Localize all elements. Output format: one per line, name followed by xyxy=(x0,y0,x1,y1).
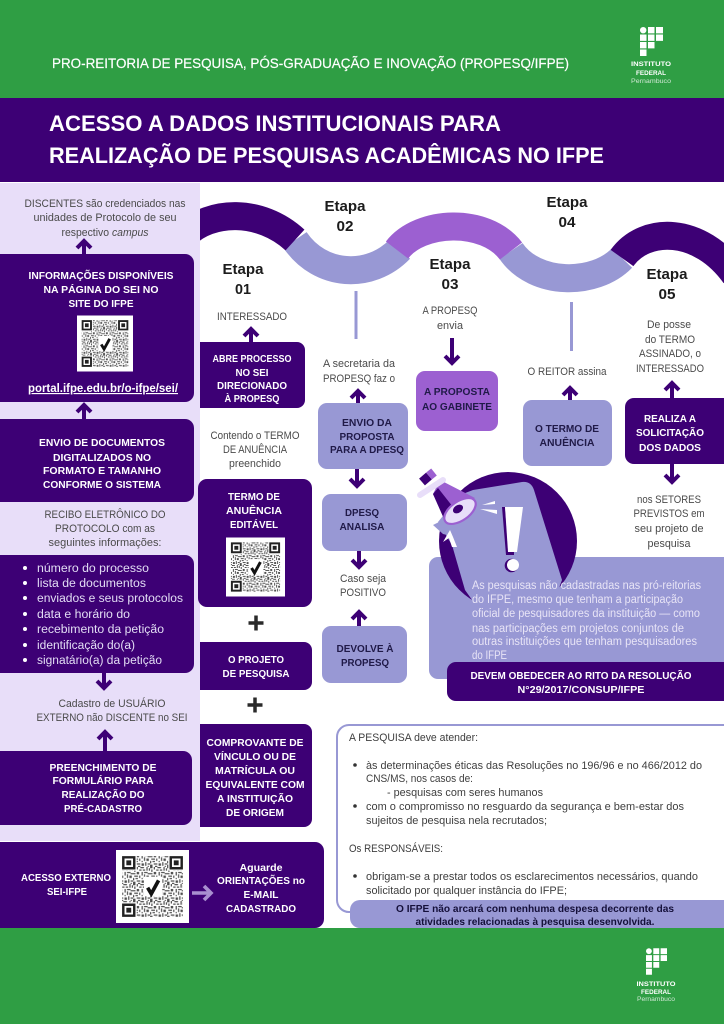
panel: envio de documentos: CONFORME O SISTEMA xyxy=(43,479,161,491)
heading: etapa 05 xyxy=(646,266,688,303)
text: cadastro xyxy=(36,697,188,724)
panel: requisitos da pesquisa: solicitado por qualquer instância do IFPE; xyxy=(366,885,567,897)
panel: informações disponíveis: NA PÁGINA DO SEI NO xyxy=(44,283,158,296)
text: contendo o termo: Contendo o TERMO xyxy=(210,430,300,442)
panel: informações disponíveis: SITE DO IFPE xyxy=(68,298,134,310)
panel: projeto de pesquisa: O PROJETO xyxy=(228,654,284,666)
panel: preenchimento: PRÉ-CADASTRO xyxy=(64,802,142,815)
panel: requisitos da pesquisa: obrigam-se a prestar todos os esclarecimentos necessários, quando xyxy=(366,871,698,883)
panel: dpesq analisa: DPESQ xyxy=(345,507,379,519)
left column background xyxy=(0,183,200,841)
panel: preenchimento: PREENCHIMENTO DE xyxy=(50,762,156,774)
panel: envio de documentos: ENVIO DE DOCUMENTOS xyxy=(39,437,165,449)
logo: Instituto Federal bottom: Pernambuco xyxy=(637,997,676,1003)
QR code: acesso externo xyxy=(116,850,189,923)
panel: lista do recibo: signatário(a) da petição xyxy=(37,655,162,667)
panel: termo de anuência: ANUÊNCIA xyxy=(540,436,595,449)
callout text: do IFPE xyxy=(472,650,507,662)
heading: etapa 01 xyxy=(222,261,264,298)
panel: comprovante de vínculo: A INSTITUIÇÃO xyxy=(217,792,293,805)
panel: proposta ao gabinete xyxy=(416,371,498,431)
icon: alert circle xyxy=(438,472,577,625)
logo: Instituto Federal bottom xyxy=(636,948,676,1003)
panel: lista do recibo xyxy=(0,555,194,673)
icon: plus xyxy=(248,616,264,630)
header text: PRO-REITORIA DE PESQUISA, PÓS-GRADUAÇÃO E INOVAÇÃO (PROPESQ/IFPE) xyxy=(52,55,569,71)
text: secretaria xyxy=(323,358,396,385)
heading: etapa 02: 02 xyxy=(336,218,354,235)
banner: resolução: N°29/2017/CONSUP/IFPE xyxy=(518,684,644,696)
panel: comprovante de vínculo xyxy=(200,724,312,827)
logo: Instituto Federal top: Pernambuco xyxy=(631,79,672,85)
panel: envio de documentos xyxy=(0,419,194,502)
text: propesq envia: A PROPESQ xyxy=(422,305,478,317)
text: nos setores: seu projeto de xyxy=(634,523,704,535)
panel: acesso externo xyxy=(0,842,324,928)
heading: etapa 04 xyxy=(546,194,588,231)
arrow down xyxy=(352,551,366,567)
title: REALIZAÇÃO DE PESQUISAS ACADÊMICAS NO IFPE xyxy=(49,143,604,168)
arrow up xyxy=(352,612,366,626)
panel: dpesq analisa xyxy=(322,494,407,551)
panel: requisitos da pesquisa: às determinações éticas das Resoluções no 196/96 e no 466/2012 do xyxy=(366,760,702,772)
text: recibo eletrônico: seguintes informações: xyxy=(48,537,162,549)
panel: acesso externo: ACESSO EXTERNO xyxy=(21,872,111,884)
panel: envio da proposta: ENVIO DA xyxy=(342,417,392,429)
arrow up xyxy=(351,391,365,403)
panel: lista do recibo: enviados e seus protocolos xyxy=(37,593,183,605)
arrow down xyxy=(350,469,364,486)
arrow down xyxy=(445,338,459,363)
link: portal.ifpe.edu.br/o-ifpe/sei/ xyxy=(28,383,179,395)
heading: etapa 01: Etapa xyxy=(222,261,264,278)
QR code: termo xyxy=(226,538,285,596)
text: recibo eletrônico: RECIBO ELETRÔNICO DO xyxy=(44,508,166,521)
text: discentes: respectivo campus xyxy=(62,227,149,239)
panel: acesso externo: CADASTRADO xyxy=(226,903,296,915)
text: reitor assina: O REITOR assina xyxy=(528,366,607,378)
panel: comprovante de vínculo: MATRÍCULA OU xyxy=(215,764,295,777)
text: de posse: INTERESSADO xyxy=(636,363,704,375)
text: caso positivo: POSITIVO xyxy=(340,587,386,599)
heading: etapa 04: Etapa xyxy=(546,194,588,211)
panel: preenchimento xyxy=(0,751,192,825)
text: de posse: ASSINADO, o xyxy=(639,348,701,360)
panel: devolve à propesq: DEVOLVE À xyxy=(336,642,394,655)
callout text: nas participações em projetos conjuntos de xyxy=(472,623,684,635)
arrow down xyxy=(665,464,679,482)
heading: etapa 02 xyxy=(324,198,366,235)
panel: requisitos da pesquisa: A PESQUISA deve atender: xyxy=(349,732,478,744)
banner: resolução xyxy=(447,662,724,701)
text: propesq envia: envia xyxy=(437,320,464,332)
panel: comprovante de vínculo: COMPROVANTE DE xyxy=(206,737,304,749)
panel: termo de anuência xyxy=(523,400,612,466)
heading: etapa 04: 04 xyxy=(558,214,576,231)
panel: termo de anuência: O TERMO DE xyxy=(535,423,599,435)
arrow up xyxy=(665,383,679,398)
panel: comprovante de vínculo: EQUIVALENTE COM xyxy=(206,779,305,791)
arrow up xyxy=(77,241,91,254)
text: caso positivo: Caso seja xyxy=(340,573,387,585)
arrow up xyxy=(77,405,91,419)
panel: termo de anuência editável xyxy=(198,479,312,607)
icon: megaphone xyxy=(420,472,497,547)
panel: proposta ao gabinete: A PROPOSTA xyxy=(424,386,490,398)
footer band xyxy=(0,928,724,1024)
panel: lista do recibo: data e horário do xyxy=(37,609,130,621)
banner: resolução: DEVEM OBEDECER AO RITO DA RESOLUÇÃO xyxy=(470,669,692,682)
text: nos setores: nos SETORES xyxy=(637,494,701,506)
arrow up xyxy=(563,388,577,400)
panel: acesso externo: SEI-IFPE xyxy=(47,886,87,898)
panel: envio da proposta xyxy=(318,403,408,469)
text: de posse xyxy=(636,319,704,375)
connector: etapa 02 xyxy=(354,291,358,339)
panel: projeto de pesquisa xyxy=(200,642,312,690)
logo: Instituto Federal top: INSTITUTO xyxy=(631,61,671,68)
header band xyxy=(0,0,724,98)
text: secretaria: A secretaria da xyxy=(323,358,396,370)
icon: plus xyxy=(248,698,262,712)
panel: acesso externo: E-MAIL xyxy=(244,889,279,901)
panel: dpesq analisa: ANALISA xyxy=(340,521,385,533)
text: de posse: do TERMO xyxy=(645,334,695,346)
panel: requisitos da pesquisa: CNS/MS, nos casos de: xyxy=(366,773,473,785)
panel: informações disponíveis: INFORMAÇÕES DISPONÍVEIS xyxy=(28,269,174,282)
heading: etapa 05: Etapa xyxy=(646,266,688,283)
connector: etapa 04 xyxy=(570,302,573,351)
text: nos setores: pesquisa xyxy=(648,538,691,550)
banner: despesas: atividades relacionadas à pesquisa desenvolvida. xyxy=(416,916,655,928)
text: interessado: INTERESSADO xyxy=(217,311,287,323)
banner: despesas: O IFPE não arcará com nenhuma despesa decorrente das xyxy=(396,903,674,915)
text: propesq envia xyxy=(422,305,478,332)
callout text: outras instituições que tenham pesquisadores xyxy=(472,636,697,648)
heading: etapa 03: Etapa xyxy=(430,256,471,273)
panel: preenchimento: REALIZAÇÃO DO xyxy=(62,788,144,801)
panel: preenchimento: FORMULÁRIO PARA xyxy=(52,774,154,787)
wave: five stages xyxy=(185,216,724,278)
panel: envio de documentos: FORMATO E TAMANHO xyxy=(43,465,161,477)
heading: etapa 05: 05 xyxy=(658,286,676,303)
text: discentes xyxy=(24,198,186,239)
panel: envio da proposta: PARA A DPESQ xyxy=(330,444,404,456)
title: ACESSO A DADOS INSTITUCIONAIS PARA xyxy=(49,111,501,136)
panel: lista do recibo: recebimento da petição xyxy=(37,624,164,636)
arrow up xyxy=(98,732,112,751)
title band xyxy=(0,98,724,182)
panel: termo de anuência editável: TERMO DE xyxy=(228,491,280,503)
panel: requisitos da pesquisa: sujeitos de pesquisa nela recrutados; xyxy=(366,815,547,827)
banner: despesas xyxy=(350,900,724,928)
panel: realiza a solicitação xyxy=(625,398,724,464)
panel: abre processo: DIRECIONADO xyxy=(217,380,287,392)
callout text: As pesquisas não cadastradas nas pró-reitorias xyxy=(472,580,701,592)
panel: abre processo: ABRE PROCESSO xyxy=(212,353,292,365)
text: nos setores: PREVISTOS em xyxy=(634,508,704,520)
panel: requisitos da pesquisa xyxy=(337,725,724,912)
logo: Instituto Federal bottom: INSTITUTO xyxy=(636,981,676,988)
panel: comprovante de vínculo: VÍNCULO OU DE xyxy=(214,750,296,763)
text: contendo o termo xyxy=(210,430,300,470)
text: recibo eletrônico xyxy=(44,508,166,549)
text: discentes: DISCENTES são credenciados nas xyxy=(24,198,186,210)
arrow right xyxy=(192,886,211,900)
panel: devolve à propesq xyxy=(322,626,407,683)
panel: lista do recibo: lista de documentos xyxy=(37,578,146,590)
panel: requisitos da pesquisa: com o compromisso no resguardo da segurança e bem-estar dos xyxy=(366,801,684,813)
text: recibo eletrônico: PROTOCOLO com as xyxy=(55,523,155,535)
arrow up xyxy=(244,329,258,342)
text: nos setores xyxy=(634,494,704,550)
text: secretaria: PROPESQ faz o xyxy=(323,373,395,385)
panel: realiza a solicitação: DOS DADOS xyxy=(639,442,701,454)
text: contendo o termo: DE ANUÊNCIA xyxy=(223,443,288,456)
panel: termo de anuência editável: EDITÁVEL xyxy=(230,518,279,531)
panel: devolve à propesq: PROPESQ xyxy=(341,657,389,669)
logo: Instituto Federal bottom: FEDERAL xyxy=(641,989,671,996)
text: caso positivo xyxy=(340,573,387,599)
panel: projeto de pesquisa: DE PESQUISA xyxy=(222,668,290,680)
text: contendo o termo: preenchido xyxy=(229,458,281,470)
panel: abre processo: NO SEI xyxy=(236,367,269,379)
panel: abre processo: À PROPESQ xyxy=(224,392,280,405)
panel: realiza a solicitação: SOLICITAÇÃO xyxy=(636,426,704,439)
heading: etapa 03 xyxy=(430,256,471,293)
panel: realiza a solicitação: REALIZA A xyxy=(644,413,696,425)
heading: etapa 02: Etapa xyxy=(324,198,366,215)
heading: etapa 01: 01 xyxy=(235,281,251,298)
text: cadastro: EXTERNO não DISCENTE no SEI xyxy=(36,712,188,724)
panel: termo de anuência editável: ANUÊNCIA xyxy=(226,504,282,517)
panel: informações disponíveis xyxy=(0,254,194,402)
panel: lista do recibo: número do processo xyxy=(37,563,149,575)
text: cadastro: Cadastro de USUÁRIO xyxy=(58,697,166,710)
panel: envio da proposta: PROPOSTA xyxy=(340,431,395,443)
panel: envio de documentos: DIGITALIZADOS NO xyxy=(53,452,151,464)
panel: comprovante de vínculo: DE ORIGEM xyxy=(226,807,284,819)
panel: acesso externo: ORIENTAÇÕES no xyxy=(217,874,305,887)
callout text: oficial de pesquisadores da instituição — como xyxy=(472,608,700,620)
panel: proposta ao gabinete: AO GABINETE xyxy=(422,401,492,413)
logo: Instituto Federal top xyxy=(631,27,672,85)
panel: requisitos da pesquisa: Os RESPONSÁVEIS: xyxy=(349,842,443,855)
callout: pesquisas não cadastradas xyxy=(420,472,724,701)
callout text xyxy=(472,580,701,662)
callout text: do IFPE, mesmo que tenham a participação xyxy=(472,594,683,606)
title xyxy=(49,111,604,168)
heading: etapa 03: 03 xyxy=(442,276,458,293)
panel: acesso externo: Aguarde xyxy=(240,862,283,874)
panel: requisitos da pesquisa: - pesquisas com seres humanos xyxy=(387,787,543,799)
text: discentes: unidades de Protocolo de seu xyxy=(34,212,176,224)
text: de posse: De posse xyxy=(647,319,691,331)
panel: lista do recibo: identificação do(a) xyxy=(37,640,135,652)
logo: Instituto Federal top: FEDERAL xyxy=(636,70,666,77)
arrow down xyxy=(97,673,111,688)
panel: abre processo xyxy=(200,342,305,408)
QR code: SEI xyxy=(77,316,133,372)
